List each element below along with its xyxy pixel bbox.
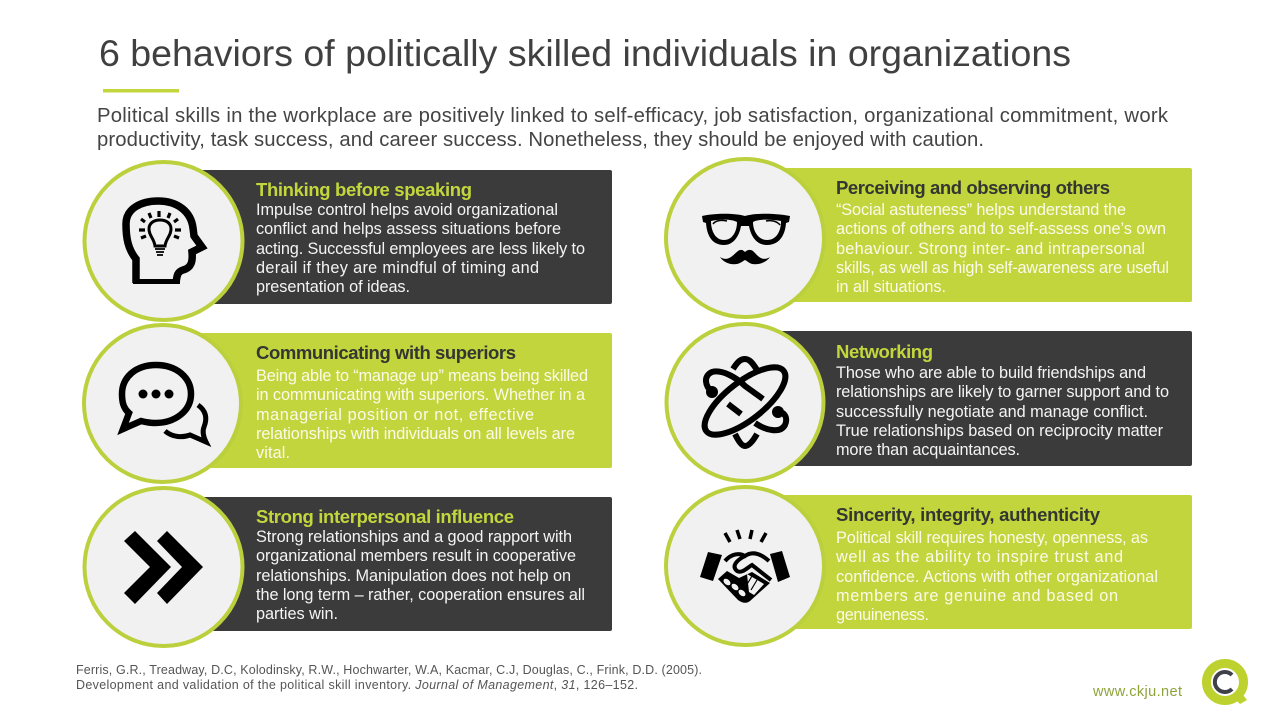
icon: double chevron <box>124 531 203 604</box>
intro text: productivity, task success, and career success. Nonetheless, they should be enjoyed with caution. <box>97 129 984 151</box>
text: communicating with superiors: vital. <box>256 444 290 462</box>
heading: perceiving and observing others: Perceiving and observing others <box>836 177 1110 198</box>
text: communicating with superiors: Being able to “manage up” means being skilled <box>256 367 588 385</box>
text: communicating with superiors: relationships with individuals on all levels are <box>256 425 575 443</box>
panel: strong interpersonal influence <box>84 488 612 646</box>
text: strong interpersonal influence: Strong relationships and a good rapport with <box>256 528 572 546</box>
text: perceiving and observing others: behaviour. Strong inter- and intrapersonal <box>836 240 1145 258</box>
icon: head with light bulb <box>126 201 202 283</box>
heading: networking: Networking <box>836 341 933 362</box>
text: strong interpersonal influence: organizational members result in cooperative <box>256 547 576 565</box>
panel: networking <box>666 324 1192 481</box>
title: 6 behaviors of politically skilled individuals in organizations <box>99 32 1071 74</box>
text: sincerity, integrity, authenticity: confidence. Actions with other organizational <box>836 568 1158 586</box>
logo <box>1206 664 1247 704</box>
text: thinking before speaking: presentation of ideas. <box>256 278 410 296</box>
icon: glasses and moustache <box>702 214 790 264</box>
text: perceiving and observing others: “Social astuteness” helps understand the <box>836 201 1126 219</box>
text: strong interpersonal influence: parties win. <box>256 605 338 623</box>
panel: communicating with superiors <box>84 325 612 482</box>
citation: Development and validation of the political skill inventory. Journal of Management, 31, 126–152. <box>76 678 638 692</box>
text: thinking before speaking: acting. Successful employees are less likely to <box>256 240 585 258</box>
heading: thinking before speaking: Thinking before speaking <box>256 179 472 200</box>
text: communicating with superiors: in communicating with superiors. Whether in a <box>256 386 586 404</box>
text: networking: successfully negotiate and manage conflict. <box>836 403 1148 421</box>
text: strong interpersonal influence: the long term – rather, cooperation ensures all <box>256 586 585 604</box>
text: perceiving and observing others: actions of others and to self-assess one’s own <box>836 220 1166 238</box>
text: perceiving and observing others: in all situations. <box>836 278 946 296</box>
text: sincerity, integrity, authenticity: members are genuine and based on <box>836 587 1118 605</box>
icon: handshake <box>700 530 790 603</box>
heading: communicating with superiors: Communicating with superiors <box>256 342 516 363</box>
text: communicating with superiors <box>256 367 588 462</box>
text: networking: relationships are likely to garner support and to <box>836 383 1169 401</box>
text: networking: Those who are able to build friendships and <box>836 364 1146 382</box>
citation: Ferris, G.R., Treadway, D.C, Kolodinsky, R.W., Hochwarter, W.A, Kacmar, C.J, Douglas, C., Frink, D.D. (2005). <box>76 663 702 677</box>
intro text: Political skills in the workplace are positively linked to self-efficacy, job satisfaction, organizational commitment, work <box>97 105 1169 127</box>
text: strong interpersonal influence <box>256 528 585 623</box>
heading: sincerity, integrity, authenticity: Sincerity, integrity, authenticity <box>836 504 1101 525</box>
citation <box>76 663 702 692</box>
text: sincerity, integrity, authenticity: genuineness. <box>836 606 929 624</box>
text: perceiving and observing others: skills, as well as high self-awareness are useful <box>836 259 1169 277</box>
text: strong interpersonal influence: relationships. Manipulation does not help on <box>256 567 571 585</box>
text: sincerity, integrity, authenticity <box>835 529 1158 624</box>
text: thinking before speaking: Impulse control helps avoid organizational <box>256 201 558 219</box>
text: sincerity, integrity, authenticity: well as the ability to inspire trust and <box>835 548 1123 566</box>
panel: sincerity, integrity, authenticity <box>666 487 1192 645</box>
intro text <box>97 105 1169 151</box>
text: thinking before speaking <box>256 201 585 296</box>
panel: perceiving and observing others <box>666 159 1192 317</box>
text: networking <box>836 364 1169 459</box>
text: thinking before speaking: derail if they are mindful of timing and <box>256 259 539 277</box>
text: networking: True relationships based on reciprocity matter <box>836 422 1164 440</box>
heading: strong interpersonal influence: Strong interpersonal influence <box>256 506 514 527</box>
panel: thinking before speaking <box>84 162 612 320</box>
website url: www.ckju.net <box>1092 684 1182 700</box>
text: thinking before speaking: conflict and helps assess situations before <box>256 220 561 238</box>
text: perceiving and observing others <box>836 201 1169 296</box>
text: communicating with superiors: managerial position or not, effective <box>256 406 534 424</box>
text: sincerity, integrity, authenticity: Political skill requires honesty, openness, as <box>836 529 1148 547</box>
icon: speech bubbles <box>122 365 206 442</box>
icon: atom <box>695 356 795 446</box>
text: networking: more than acquaintances. <box>836 441 1020 459</box>
